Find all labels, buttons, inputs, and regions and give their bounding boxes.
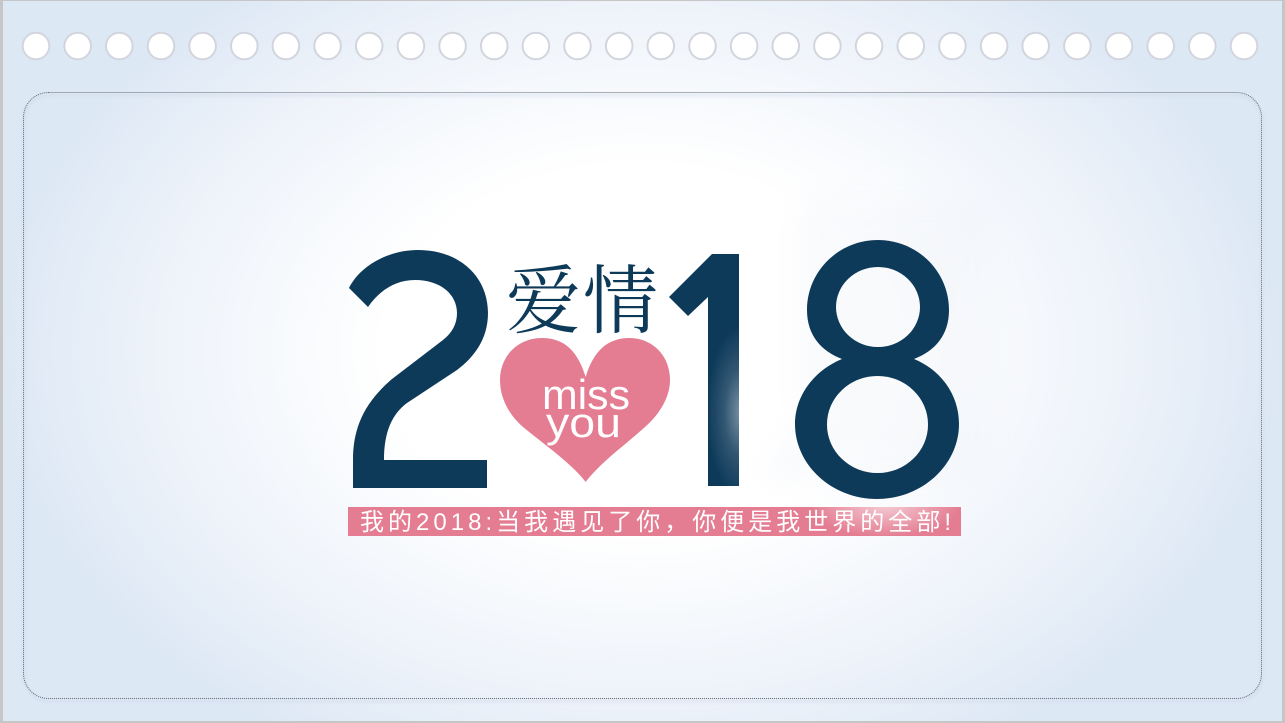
heart icon bbox=[500, 338, 670, 482]
slogan banner bbox=[348, 507, 961, 536]
digit 2 bbox=[349, 250, 488, 488]
slogan text: 我的2018:当我遇见了你，你便是我世界的全部! bbox=[360, 509, 951, 536]
heading: 爱情: 爱情 bbox=[506, 242, 658, 349]
calendar binding holes bbox=[23, 33, 1257, 59]
heart text: you: you bbox=[546, 399, 621, 446]
digit 8 bbox=[795, 240, 959, 499]
digit 1 bbox=[669, 254, 739, 486]
light glare on digit 1 bbox=[669, 254, 739, 486]
heart text: miss: miss bbox=[542, 371, 630, 418]
faint watermark bbox=[760, 200, 990, 480]
